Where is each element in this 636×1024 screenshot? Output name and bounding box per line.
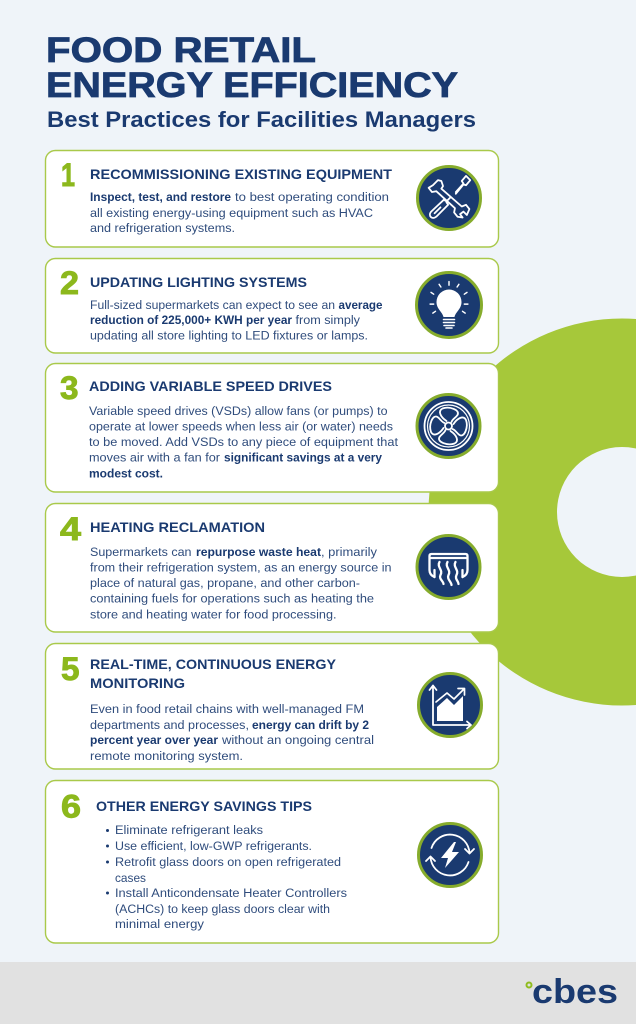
number 5: 5 — [61, 651, 80, 687]
body text: from their refrigeration system, as an energy source in — [90, 560, 392, 574]
body text: from simply — [296, 313, 361, 327]
heading — [90, 656, 337, 691]
body text: remote monitoring system. — [90, 749, 243, 763]
body text: all existing energy-using equipment such as HVAC — [90, 206, 373, 220]
footer band — [0, 962, 636, 1024]
number 1: 1 — [61, 157, 75, 193]
main title — [46, 31, 458, 105]
body text: Full-sized supermarkets can expect to see an — [90, 298, 335, 312]
icon: heat waves — [417, 536, 480, 598]
body text — [90, 545, 392, 622]
main title: FOOD RETAIL — [46, 31, 316, 70]
icon: rising chart — [418, 674, 482, 736]
body text: without an ongoing central — [221, 733, 374, 747]
body text: store and heating water for food processing. — [90, 608, 336, 622]
heading: HEATING RECLAMATION — [90, 519, 265, 535]
bullet list: minimal energy — [115, 917, 205, 931]
body text: Inspect, test, and restore — [90, 190, 231, 204]
body text — [90, 298, 383, 342]
panel: energy monitoring — [46, 644, 498, 769]
body text: percent year over year — [90, 733, 218, 747]
main title: ENERGY EFFICIENCY — [46, 66, 458, 105]
body text: containing fuels for operations such as heating the — [90, 592, 374, 606]
body text: average — [338, 298, 383, 312]
icon: light bulb — [416, 272, 482, 338]
body text: and refrigeration systems. — [90, 221, 235, 235]
heading: OTHER ENERGY SAVINGS TIPS — [96, 798, 312, 814]
body text: significant savings at a very — [224, 450, 382, 464]
title block — [46, 31, 476, 132]
number 2: 2 — [60, 265, 79, 301]
bullet list: (ACHCs) to keep glass doors clear with — [115, 902, 330, 916]
body text: modest cost. — [89, 466, 163, 480]
body text: moves air with a fan for — [89, 450, 220, 464]
heading: UPDATING LIGHTING SYSTEMS — [90, 274, 307, 290]
icon: energy cycle — [418, 824, 482, 886]
number 3: 3 — [60, 370, 78, 406]
body text: Even in food retail chains with well-managed FM — [90, 702, 364, 716]
body text: Supermarkets can — [90, 545, 192, 559]
body text: updating all store lighting to LED fixtures or lamps. — [90, 328, 368, 342]
decorative green ring — [428, 318, 636, 706]
body text: to best operating condition — [235, 190, 389, 204]
logo: cbes: cbes — [532, 973, 618, 1011]
body text — [89, 404, 399, 480]
body text: , primarily — [321, 545, 378, 559]
bullet list: cases — [115, 871, 146, 885]
body text: place of natural gas, propane, and other carbon- — [90, 576, 360, 590]
body text: reduction of 225,000+ KWH per year — [90, 313, 292, 327]
bullet list: Retrofit glass doors on open refrigerated — [115, 855, 341, 869]
body text — [90, 702, 374, 763]
body text — [90, 190, 389, 235]
body text: repurpose waste heat — [196, 545, 321, 559]
body text: operate at lower speeds when less air (or water) needs — [89, 420, 393, 434]
heading: RECOMMISSIONING EXISTING EQUIPMENT — [90, 166, 392, 182]
icon: fan — [417, 394, 480, 458]
panel: lighting — [46, 258, 498, 353]
bullet list: Eliminate refrigerant leaks — [115, 823, 263, 837]
panel: heating reclamation — [46, 504, 498, 632]
panel: variable speed drives — [46, 364, 498, 492]
subtitle: Best Practices for Facilities Managers — [47, 107, 476, 132]
body text: departments and processes, — [90, 718, 249, 732]
body text: to be moved. Add VSDs to any piece of equipment that — [89, 435, 399, 449]
bullet list: Install Anticondensate Heater Controllers — [115, 886, 347, 900]
heading: REAL-TIME, CONTINUOUS ENERGY — [90, 656, 337, 672]
icon: wrench and screwdriver — [418, 166, 480, 230]
body text: energy can drift by 2 — [252, 718, 369, 732]
bullet list — [106, 823, 347, 931]
panel: other tips — [46, 780, 498, 943]
body text: Variable speed drives (VSDs) allow fans (or pumps) to — [89, 404, 388, 418]
heading: ADDING VARIABLE SPEED DRIVES — [89, 378, 332, 394]
number 4: 4 — [60, 511, 81, 547]
panel: recommissioning — [46, 150, 498, 247]
number 6: 6 — [61, 788, 81, 824]
heading: MONITORING — [90, 675, 185, 691]
bullet list: Use efficient, low-GWP refrigerants. — [115, 839, 312, 853]
